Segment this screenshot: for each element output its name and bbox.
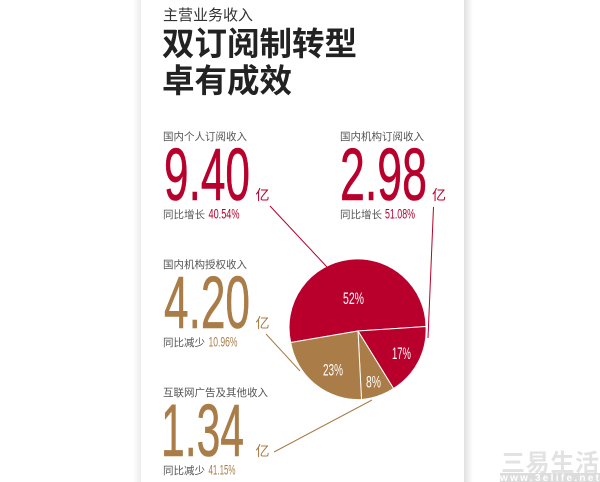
stat: domestic institutional licensing: 国内机构授权收入 — [163, 258, 247, 271]
stat: internet advertising and other: 亿 — [256, 443, 270, 459]
slice 8% — [358, 331, 394, 400]
pie labels: 52% — [343, 289, 364, 308]
pie chart — [289, 259, 426, 400]
stat: domestic individual subscription: 40.54% — [208, 206, 240, 222]
stat: domestic institutional subscription: 同比增长 — [340, 208, 382, 221]
stat: internet advertising and other: 同比减少 — [163, 464, 205, 477]
stat: domestic institutional licensing: 亿 — [256, 315, 270, 331]
stat: domestic institutional licensing — [163, 258, 270, 350]
stat: domestic individual subscription: 国内个人订阅收入 — [163, 130, 247, 143]
slice 23% — [291, 331, 362, 400]
stat: domestic individual subscription: 同比增长 — [163, 208, 205, 221]
leader line: 9.40 to pie — [270, 206, 327, 267]
stat: internet advertising and other: 1.34 — [161, 389, 244, 472]
pie labels: 23% — [323, 360, 343, 380]
slice 52% — [289, 259, 426, 342]
subtitle: 主营业务收入 — [163, 7, 253, 24]
slice 17% — [358, 326, 426, 388]
stat: domestic institutional subscription: 国内机构订阅收入 — [340, 130, 424, 143]
watermark: 三易生活 — [501, 450, 599, 477]
stat: domestic institutional subscription: 2.98 — [340, 133, 427, 216]
heading block — [162, 7, 357, 99]
stat: internet advertising and other — [161, 386, 270, 478]
stat: domestic institutional subscription: 亿 — [432, 187, 446, 203]
leader line: 2.98 to pie — [428, 207, 434, 338]
pie labels — [323, 289, 411, 392]
leader line: 1.34 to pie — [274, 400, 372, 452]
stat: domestic institutional licensing: 4.20 — [164, 261, 250, 344]
stat: internet advertising and other: 互联网广告及其他收入 — [163, 386, 268, 399]
leader line: 4.20 to pie — [266, 334, 300, 371]
stat: domestic individual subscription: 9.40 — [164, 133, 250, 216]
pie labels: 17% — [392, 344, 411, 363]
stat: domestic individual subscription — [163, 130, 270, 222]
main title — [162, 26, 357, 99]
main title: 卓有成效 — [162, 63, 292, 99]
stat: domestic institutional subscription: 51.08% — [385, 206, 415, 222]
stat: domestic institutional subscription — [340, 130, 446, 222]
stat: domestic individual subscription: 亿 — [256, 187, 270, 203]
stat: domestic institutional licensing: 10.96% — [208, 334, 238, 350]
pie labels: 8% — [366, 372, 381, 392]
stat: internet advertising and other: 41.15% — [208, 462, 236, 478]
main title: 双订阅制转型 — [162, 26, 357, 62]
stat: domestic institutional licensing: 同比减少 — [163, 336, 205, 349]
